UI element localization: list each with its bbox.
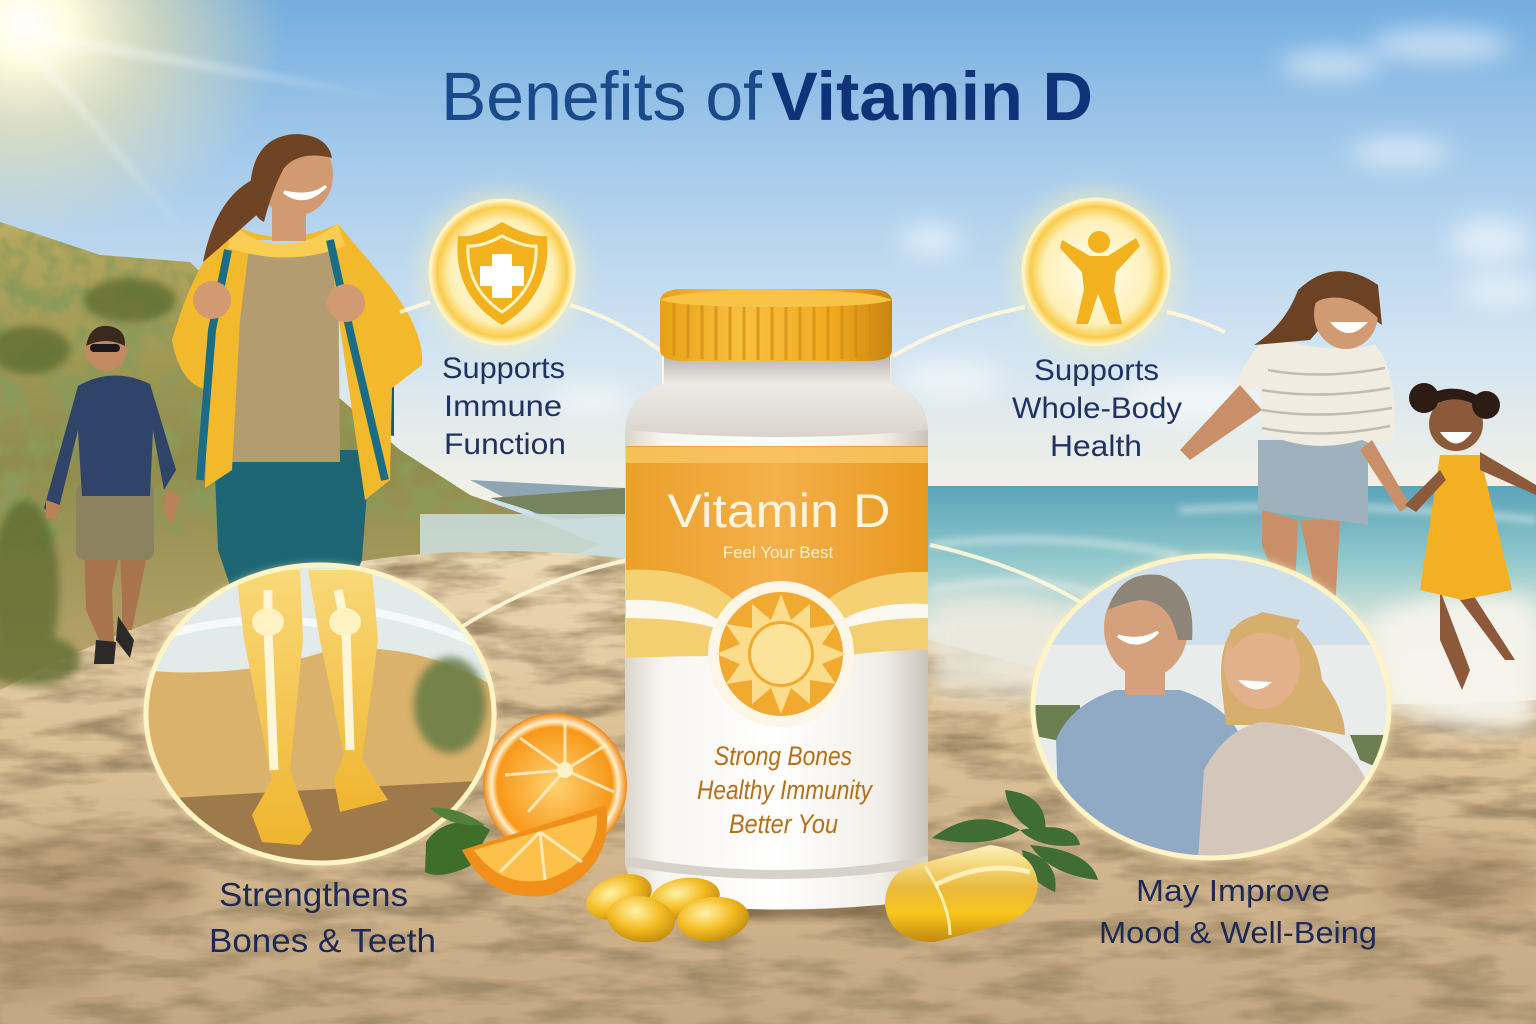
label: may improve mood & well-being: May Improve xyxy=(1136,873,1330,908)
icon: sun badge xyxy=(708,581,854,727)
label: supports immune function: Supports xyxy=(442,352,565,385)
title: Vitamin D xyxy=(771,58,1093,135)
vitamin D bottle: Feel Your Best xyxy=(723,543,834,562)
bottle slogan: Strong Bones xyxy=(714,741,852,771)
inset: glowing leg bones xyxy=(140,560,500,870)
label: supports whole-body health: Supports xyxy=(1034,354,1159,387)
large softgel capsule xyxy=(885,845,1038,942)
label: strengthens bones & teeth xyxy=(209,876,436,959)
label: supports immune function: Immune xyxy=(444,390,562,423)
label: supports whole-body health: Whole-Body xyxy=(1012,392,1182,425)
orange fruit xyxy=(425,713,627,897)
person: girl in yellow dress xyxy=(1405,383,1536,690)
label: strengthens bones & teeth: Strengthens xyxy=(219,876,408,913)
herb leaves xyxy=(932,790,1098,892)
vitamin D bottle xyxy=(590,289,970,919)
label text: Vitamin D xyxy=(668,484,890,537)
label: supports immune function: Function xyxy=(444,428,566,461)
label: strengthens bones & teeth: Bones & Teeth xyxy=(209,922,436,959)
bottle slogan: Better You xyxy=(729,809,838,839)
icon: whole body figure xyxy=(1016,192,1176,352)
title: Benefits of xyxy=(441,58,763,135)
person: woman running on the right xyxy=(1180,271,1410,610)
cap xyxy=(660,289,892,361)
icon: shield with cross, immune function xyxy=(424,194,580,350)
label: supports whole-body health xyxy=(1012,354,1182,463)
bottle slogan: Healthy Immunity xyxy=(697,775,873,805)
inset: smiling couple xyxy=(1030,553,1395,865)
softgel capsules xyxy=(580,866,751,948)
person: woman hiker in yellow jacket xyxy=(172,134,422,600)
label: may improve mood & well-being xyxy=(1099,873,1377,950)
title xyxy=(441,58,1093,135)
person: man walking in background xyxy=(44,326,180,664)
bottle slogan xyxy=(697,741,873,839)
connector lines xyxy=(400,302,1225,628)
label: may improve mood & well-being: Mood & Well-Being xyxy=(1099,915,1377,950)
label: supports whole-body health: Health xyxy=(1050,430,1142,463)
label: supports immune function xyxy=(442,352,566,461)
